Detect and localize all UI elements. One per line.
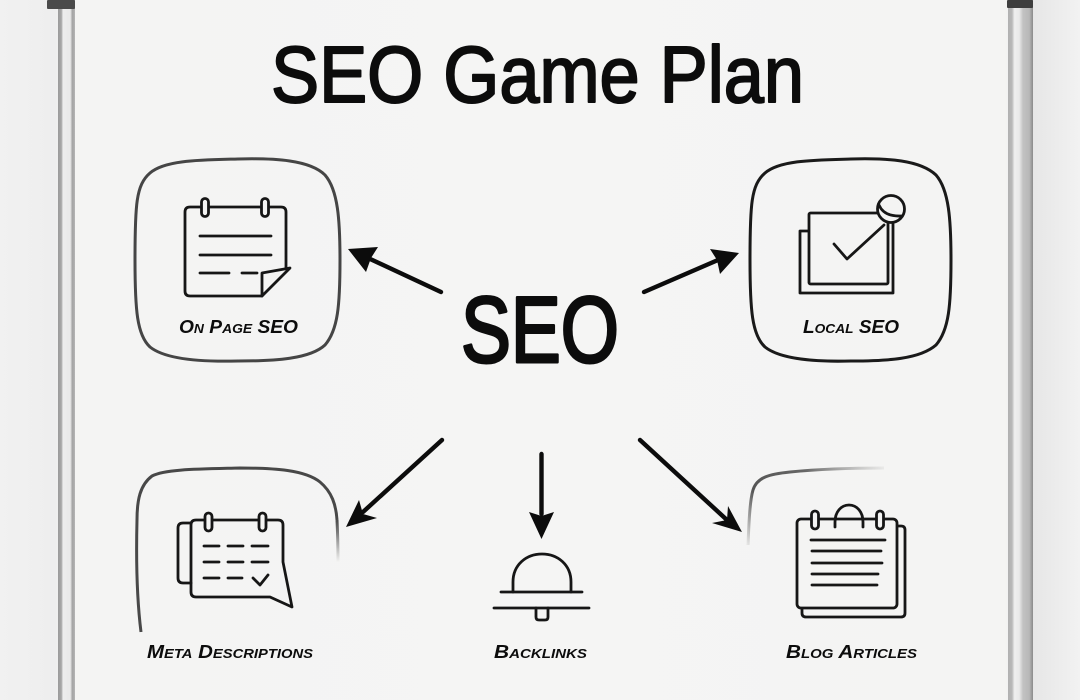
panel: Local SEO xyxy=(750,159,951,361)
outline fade end xyxy=(337,520,338,562)
icon: calendar speech bubble xyxy=(178,513,292,607)
icon: clipboard notebook xyxy=(797,505,905,617)
arrow: to Meta Descriptions xyxy=(346,440,442,527)
title: SEO Game Plan xyxy=(271,30,804,119)
arrow: to On Page SEO xyxy=(348,247,441,292)
left whiteboard rail xyxy=(47,0,75,700)
label: On Page SEO xyxy=(179,317,298,337)
center label: SEO: SEO xyxy=(461,277,619,382)
partial panel outline xyxy=(748,468,884,545)
panel outline xyxy=(750,159,951,361)
panel: Meta Descriptions xyxy=(137,468,338,662)
label: Meta Descriptions xyxy=(147,642,313,662)
right whiteboard rail xyxy=(1007,0,1033,700)
label: Backlinks xyxy=(494,642,587,662)
icon: pinned checklist pages xyxy=(800,196,904,293)
arrow: to Local SEO xyxy=(644,249,739,292)
arrow: to Blog Articles xyxy=(640,440,742,532)
label: Local SEO xyxy=(803,317,899,337)
icon: bell xyxy=(494,554,589,620)
icon: notepad with folded corner xyxy=(185,198,290,296)
panel: Backlinks xyxy=(494,554,589,662)
partial panel outline xyxy=(137,468,337,632)
label: Blog Articles xyxy=(786,642,917,662)
panel outline xyxy=(135,159,340,361)
arrow: to Backlinks xyxy=(529,454,554,539)
panel: Blog Articles xyxy=(748,468,917,662)
panel: On Page SEO xyxy=(135,159,340,361)
